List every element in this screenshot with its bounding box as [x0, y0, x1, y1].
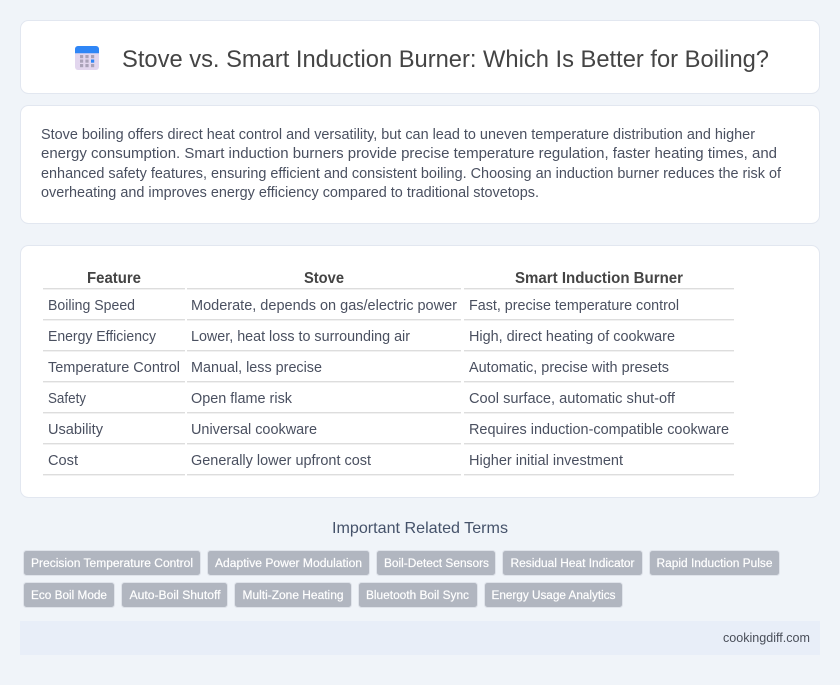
table rows: Boiling Speed [48, 298, 135, 314]
table rows: Moderate, depends on gas/electric power [191, 298, 457, 314]
table rows: Open flame risk [191, 391, 293, 407]
related term chips: Rapid Induction Pulse [656, 556, 773, 570]
related term chips: Energy Usage Analytics [492, 588, 616, 602]
heading: related terms: Important Related Terms [332, 520, 508, 537]
panel: comparison table [20, 246, 820, 498]
panel: intro paragraph: enhanced safety features, ensuring efficient and consistent boiling. Choosing an induction burner reduces the risk of [41, 166, 782, 182]
related term chips: Boil-Detect Sensors [384, 556, 489, 570]
table header: Smart Induction Burner [515, 270, 683, 287]
table rows: Universal cookware [191, 422, 317, 438]
header panel [20, 20, 820, 94]
panel: intro paragraph: Stove boiling offers direct heat control and versatility, but can lead to uneven temperature distribution and higher [41, 127, 755, 143]
footer bar [20, 621, 820, 655]
related term chips: Multi-Zone Heating [242, 588, 344, 602]
panel: intro paragraph [20, 106, 820, 224]
table rows: Generally lower upfront cost [191, 453, 371, 469]
table rows: Energy Efficiency [48, 329, 157, 345]
related term chips [24, 550, 780, 608]
table rows: Requires induction-compatible cookware [469, 422, 729, 438]
table rows: Usability [48, 422, 104, 438]
related term chips: Precision Temperature Control [31, 556, 193, 570]
related term chips: Eco Boil Mode [31, 588, 107, 602]
related term chips: Adaptive Power Modulation [215, 556, 362, 570]
table rows: High, direct heating of cookware [469, 329, 675, 345]
table rows: Cost [48, 453, 78, 469]
table header: Feature [87, 270, 141, 287]
table rows: Manual, less precise [191, 360, 322, 376]
related term chips: Residual Heat Indicator [510, 556, 634, 570]
related term chips: Auto-Boil Shutoff [130, 588, 221, 602]
table rows: Higher initial investment [469, 453, 623, 469]
table rows: Automatic, precise with presets [469, 360, 669, 376]
panel: intro paragraph: energy consumption. Smart induction burners provide precise temperature regulation, faster heating times, and [41, 146, 777, 162]
panel: intro paragraph: overheating and improves energy efficiency compared to traditional stovetops. [41, 185, 539, 201]
table rows: Safety [48, 391, 87, 407]
table rows [48, 298, 729, 469]
icon: calendar [75, 46, 99, 70]
table rows: Cool surface, automatic shut-off [469, 391, 676, 407]
table rows: Fast, precise temperature control [469, 298, 679, 314]
table rows: Lower, heat loss to surrounding air [191, 329, 410, 345]
table header: Stove [304, 270, 344, 287]
title: Stove vs. Smart Induction Burner: Which Is Better for Boiling? [122, 46, 769, 73]
related term chips: Bluetooth Boil Sync [366, 588, 469, 602]
table rows: Temperature Control [48, 360, 180, 376]
footer source text: cookingdiff.com [723, 631, 810, 645]
table header [87, 270, 683, 287]
